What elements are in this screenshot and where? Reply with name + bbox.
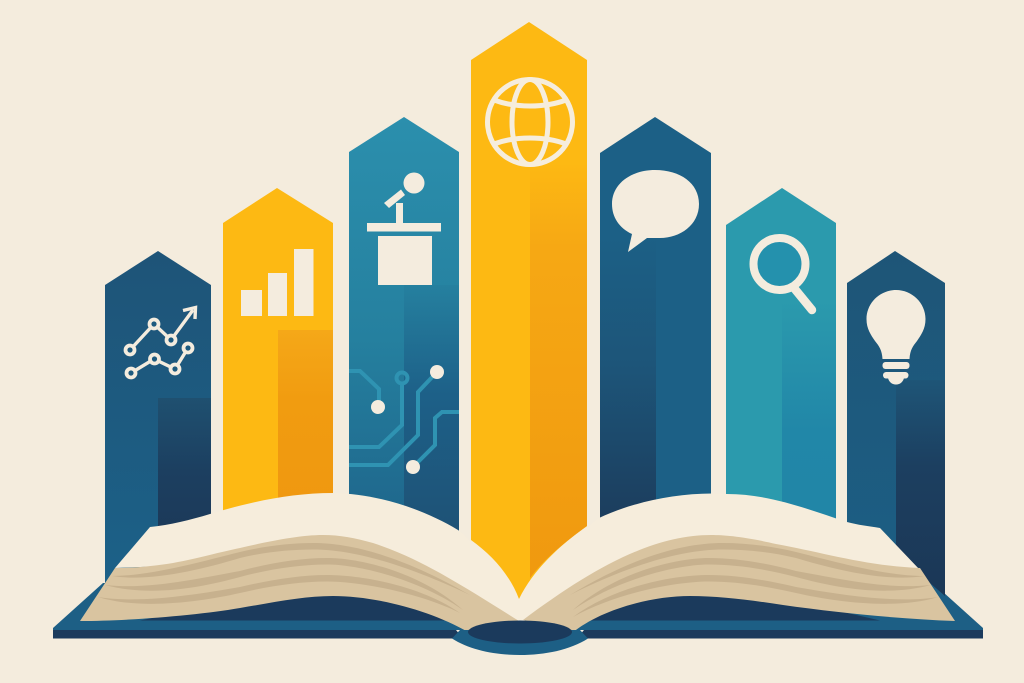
icon: line charts with arrow	[126, 308, 196, 378]
centre gutter of the pages	[470, 524, 590, 622]
book cover	[53, 583, 983, 638]
column 5 dark shade	[600, 235, 656, 560]
column 3: podium and circuit	[349, 117, 460, 560]
column 6 shade	[782, 300, 836, 560]
left page	[80, 493, 519, 632]
column 1: trend chart	[105, 251, 211, 584]
right page lines	[570, 543, 938, 617]
icon: globe	[488, 80, 572, 164]
icon: podium with microphone	[367, 172, 441, 285]
right page	[519, 494, 955, 633]
left page and right page	[80, 493, 955, 633]
column 2 orange shade	[278, 330, 333, 560]
column 6: magnifier	[726, 188, 836, 560]
circuit nodes	[371, 365, 444, 474]
column 2: bar chart	[223, 188, 333, 560]
column 4: central globe column	[471, 22, 587, 599]
spine hollow	[468, 620, 572, 644]
column 1 dark shade	[158, 398, 211, 560]
right page edge stack	[523, 535, 955, 633]
icon: magnifying glass	[754, 238, 812, 310]
column 7 dark shade	[896, 380, 945, 596]
column 5: speech bubble	[600, 117, 711, 560]
left page edge stack	[80, 535, 519, 632]
column 3 dark shade	[404, 285, 459, 560]
left page lines	[98, 543, 470, 613]
icon: circuit traces	[349, 371, 460, 467]
icon: bar chart	[241, 249, 314, 316]
under-page shadow right	[578, 590, 880, 620]
icon: lightbulb	[866, 290, 926, 384]
book spine	[452, 620, 588, 655]
under-page shadow left	[140, 590, 462, 620]
cover side edge left	[53, 630, 461, 638]
column 4 orange shade	[530, 165, 587, 578]
cover side edge right	[579, 630, 983, 638]
icon: speech bubble	[612, 170, 699, 252]
column 7: lightbulb	[847, 251, 945, 596]
